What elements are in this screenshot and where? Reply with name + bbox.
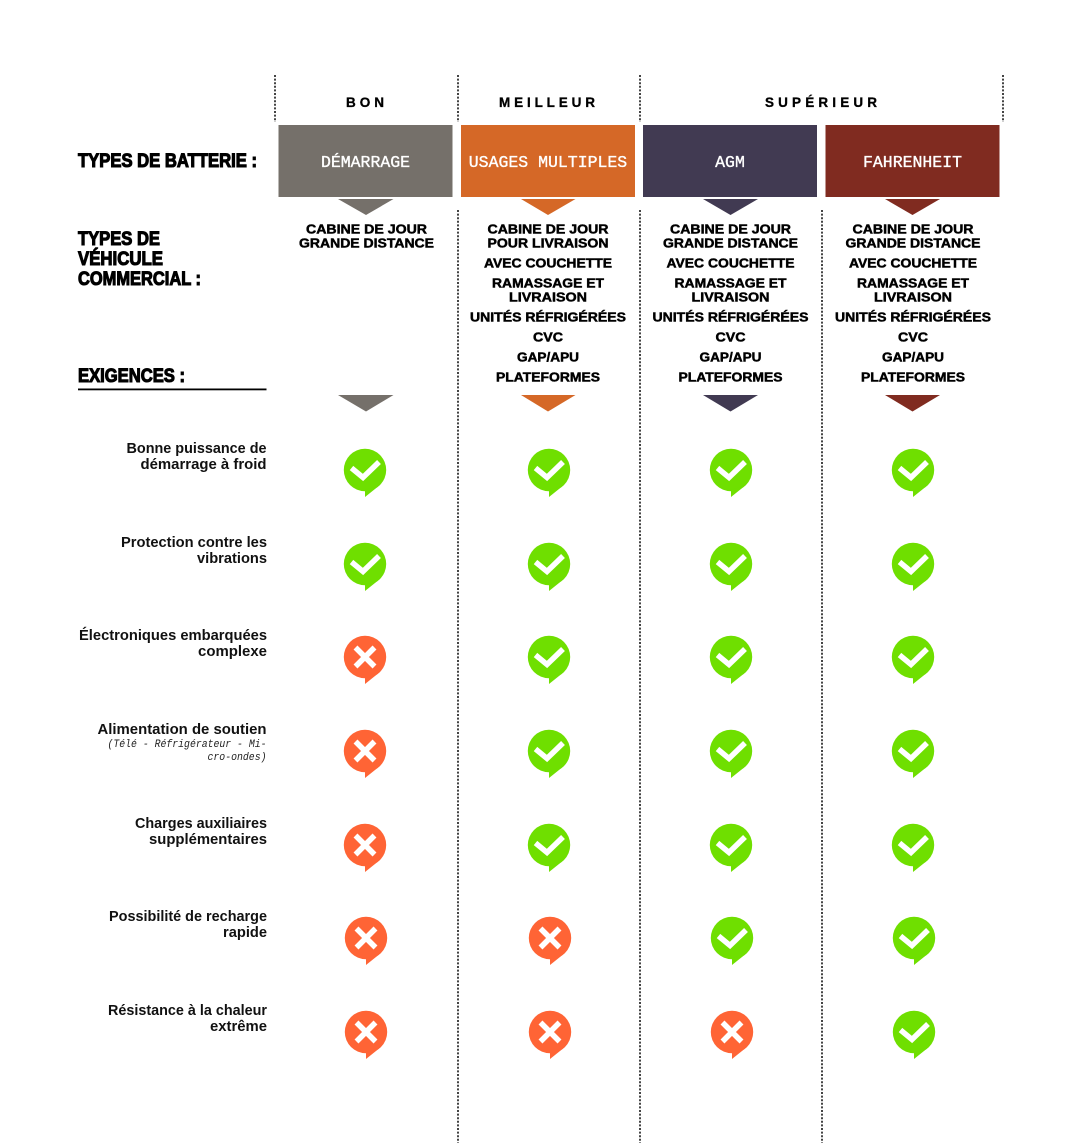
requirement: bonne puissance de demarrage a froid <box>126 441 266 473</box>
battery type: demarrage <box>278 125 452 215</box>
vehicle list: AGM: CABINE DE JOUR <box>670 222 791 236</box>
requirement: resistance a la chaleur extreme: extrême <box>210 1019 267 1035</box>
heading: types de vehicule commercial <box>78 229 201 290</box>
vehicle list: AGM: GAP/APU <box>700 350 762 364</box>
vehicle list: AGM: LIVRAISON <box>692 290 770 304</box>
vehicle list: fahrenheit <box>835 222 991 384</box>
vehicle list: AGM: GRANDE DISTANCE <box>663 236 798 250</box>
requirement: possibilite de recharge rapide <box>109 909 267 941</box>
vehicle list: usages multiples: LIVRAISON <box>509 290 587 304</box>
vehicle list: AGM: AVEC COUCHETTE <box>666 256 794 270</box>
heading: types de vehicule commercial: COMMERCIAL : <box>78 269 201 290</box>
requirement: alimentation de soutien: (Télé - Réfrigérateur - Mi- <box>108 739 266 751</box>
icon row: electroniques <box>344 636 934 684</box>
requirement: resistance a la chaleur extreme <box>108 1003 267 1035</box>
battery type: usages multiples <box>461 125 635 215</box>
vehicle list: fahrenheit: CABINE DE JOUR <box>852 222 974 236</box>
tier labels: BON <box>346 95 384 110</box>
heading: exigences: EXIGENCES : <box>78 366 185 387</box>
tier labels <box>346 95 877 110</box>
battery type: demarrage: DÉMARRAGE <box>321 153 410 172</box>
vehicle list: usages multiples: PLATEFORMES <box>496 370 600 384</box>
requirement: charges auxiliaires supplementaires <box>135 816 267 848</box>
vehicle list: fahrenheit: LIVRAISON <box>874 290 952 304</box>
vehicle list: AGM <box>652 222 808 384</box>
requirement: electroniques embarquees complexe <box>79 627 267 660</box>
heading: types de vehicule commercial: VÉHICULE <box>78 248 163 270</box>
vehicle list: fahrenheit: AVEC COUCHETTE <box>849 256 977 270</box>
vehicle list: fahrenheit: GRANDE DISTANCE <box>846 236 980 250</box>
vehicle list: usages multiples: CVC <box>533 330 563 344</box>
vehicle list: usages multiples: CABINE DE JOUR <box>488 222 608 236</box>
heading: types de batterie: TYPES DE BATTERIE : <box>78 151 257 172</box>
vehicle list: usages multiples: UNITÉS RÉFRIGÉRÉES <box>470 310 626 324</box>
battery type: AGM: AGM <box>715 153 745 172</box>
icon row: protection vibrations <box>344 543 934 591</box>
vehicle list: fahrenheit: UNITÉS RÉFRIGÉRÉES <box>835 310 991 324</box>
requirement: electroniques embarquees complexe: complexe <box>198 644 267 660</box>
vehicle list: fahrenheit: CVC <box>898 330 928 344</box>
vehicle list: AGM: RAMASSAGE ET <box>674 276 787 290</box>
requirement: electroniques embarquees complexe: Électroniques embarquées <box>79 627 267 644</box>
icon row: bonne puissance <box>344 449 934 497</box>
vehicle list: usages multiples <box>470 222 626 384</box>
vehicle list: usages multiples: RAMASSAGE ET <box>492 276 604 290</box>
icon row: charges auxiliaires <box>344 824 934 872</box>
icon row: resistance chaleur <box>345 1011 935 1059</box>
vehicle list: AGM: CVC <box>716 330 746 344</box>
vehicle list: fahrenheit: RAMASSAGE ET <box>857 276 969 290</box>
icon row: alimentation <box>344 730 934 778</box>
requirement: alimentation de soutien: cro-ondes) <box>208 752 266 764</box>
requirement: possibilite de recharge rapide: Possibilité de recharge <box>109 909 267 925</box>
vehicle list: AGM: PLATEFORMES <box>678 370 782 384</box>
requirement: charges auxiliaires supplementaires: Charges auxiliaires <box>135 816 267 832</box>
vehicle list: fahrenheit: GAP/APU <box>882 350 944 364</box>
vehicle list: demarrage: CABINE DE JOUR <box>306 222 427 236</box>
requirement: alimentation de soutien: Alimentation de soutien <box>98 722 266 738</box>
vehicle list: demarrage <box>299 222 434 250</box>
requirement: bonne puissance de demarrage a froid: démarrage à froid <box>140 457 266 473</box>
requirement: resistance a la chaleur extreme: Résistance à la chaleur <box>108 1003 267 1019</box>
requirement: charges auxiliaires supplementaires: supplémentaires <box>149 832 267 848</box>
column arrows above requirements <box>338 395 940 412</box>
vehicle list: AGM: UNITÉS RÉFRIGÉRÉES <box>652 310 808 324</box>
heading: types de vehicule commercial: TYPES DE <box>78 229 160 250</box>
tier labels: MEILLEUR <box>499 95 595 110</box>
requirement: protection contre les vibrations <box>121 535 267 567</box>
tier labels: SUPÉRIEUR <box>765 95 877 110</box>
dotted column dividers <box>275 75 1003 1143</box>
vehicle list: usages multiples: POUR LIVRAISON <box>488 236 608 250</box>
icon row: recharge rapide <box>345 917 935 965</box>
vehicle list: usages multiples: GAP/APU <box>517 350 579 364</box>
vehicle list: fahrenheit: PLATEFORMES <box>861 370 965 384</box>
vehicle list: usages multiples: AVEC COUCHETTE <box>484 256 612 270</box>
battery type: AGM <box>643 125 817 215</box>
requirement: alimentation de soutien <box>98 722 266 764</box>
requirement: possibilite de recharge rapide: rapide <box>223 925 267 941</box>
requirement: protection contre les vibrations: Protection contre les <box>121 535 267 551</box>
battery type: fahrenheit: FAHRENHEIT <box>863 153 962 172</box>
requirement: bonne puissance de demarrage a froid: Bonne puissance de <box>126 441 266 457</box>
battery type: usages multiples: USAGES MULTIPLES <box>469 153 627 172</box>
battery type: fahrenheit <box>826 125 1000 215</box>
vehicle list: demarrage: GRANDE DISTANCE <box>299 236 434 250</box>
requirement: protection contre les vibrations: vibrations <box>197 551 267 567</box>
